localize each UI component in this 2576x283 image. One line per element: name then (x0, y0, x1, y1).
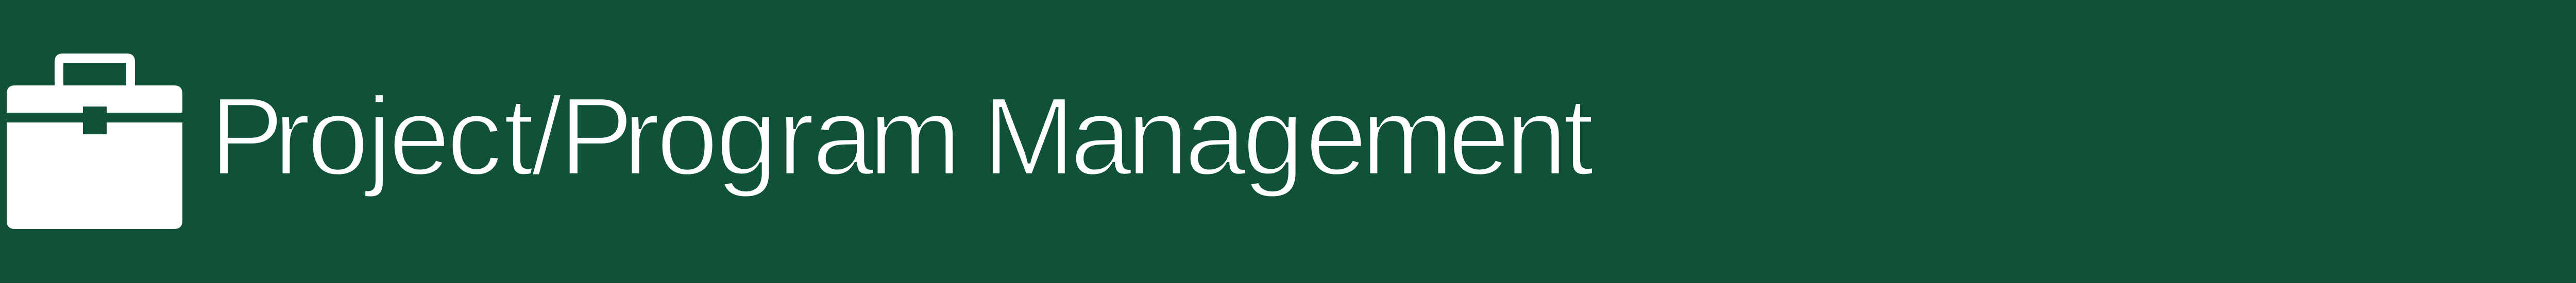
icon: toolbox briefcase (7, 54, 182, 229)
title: Project/Program Management (210, 74, 1594, 198)
